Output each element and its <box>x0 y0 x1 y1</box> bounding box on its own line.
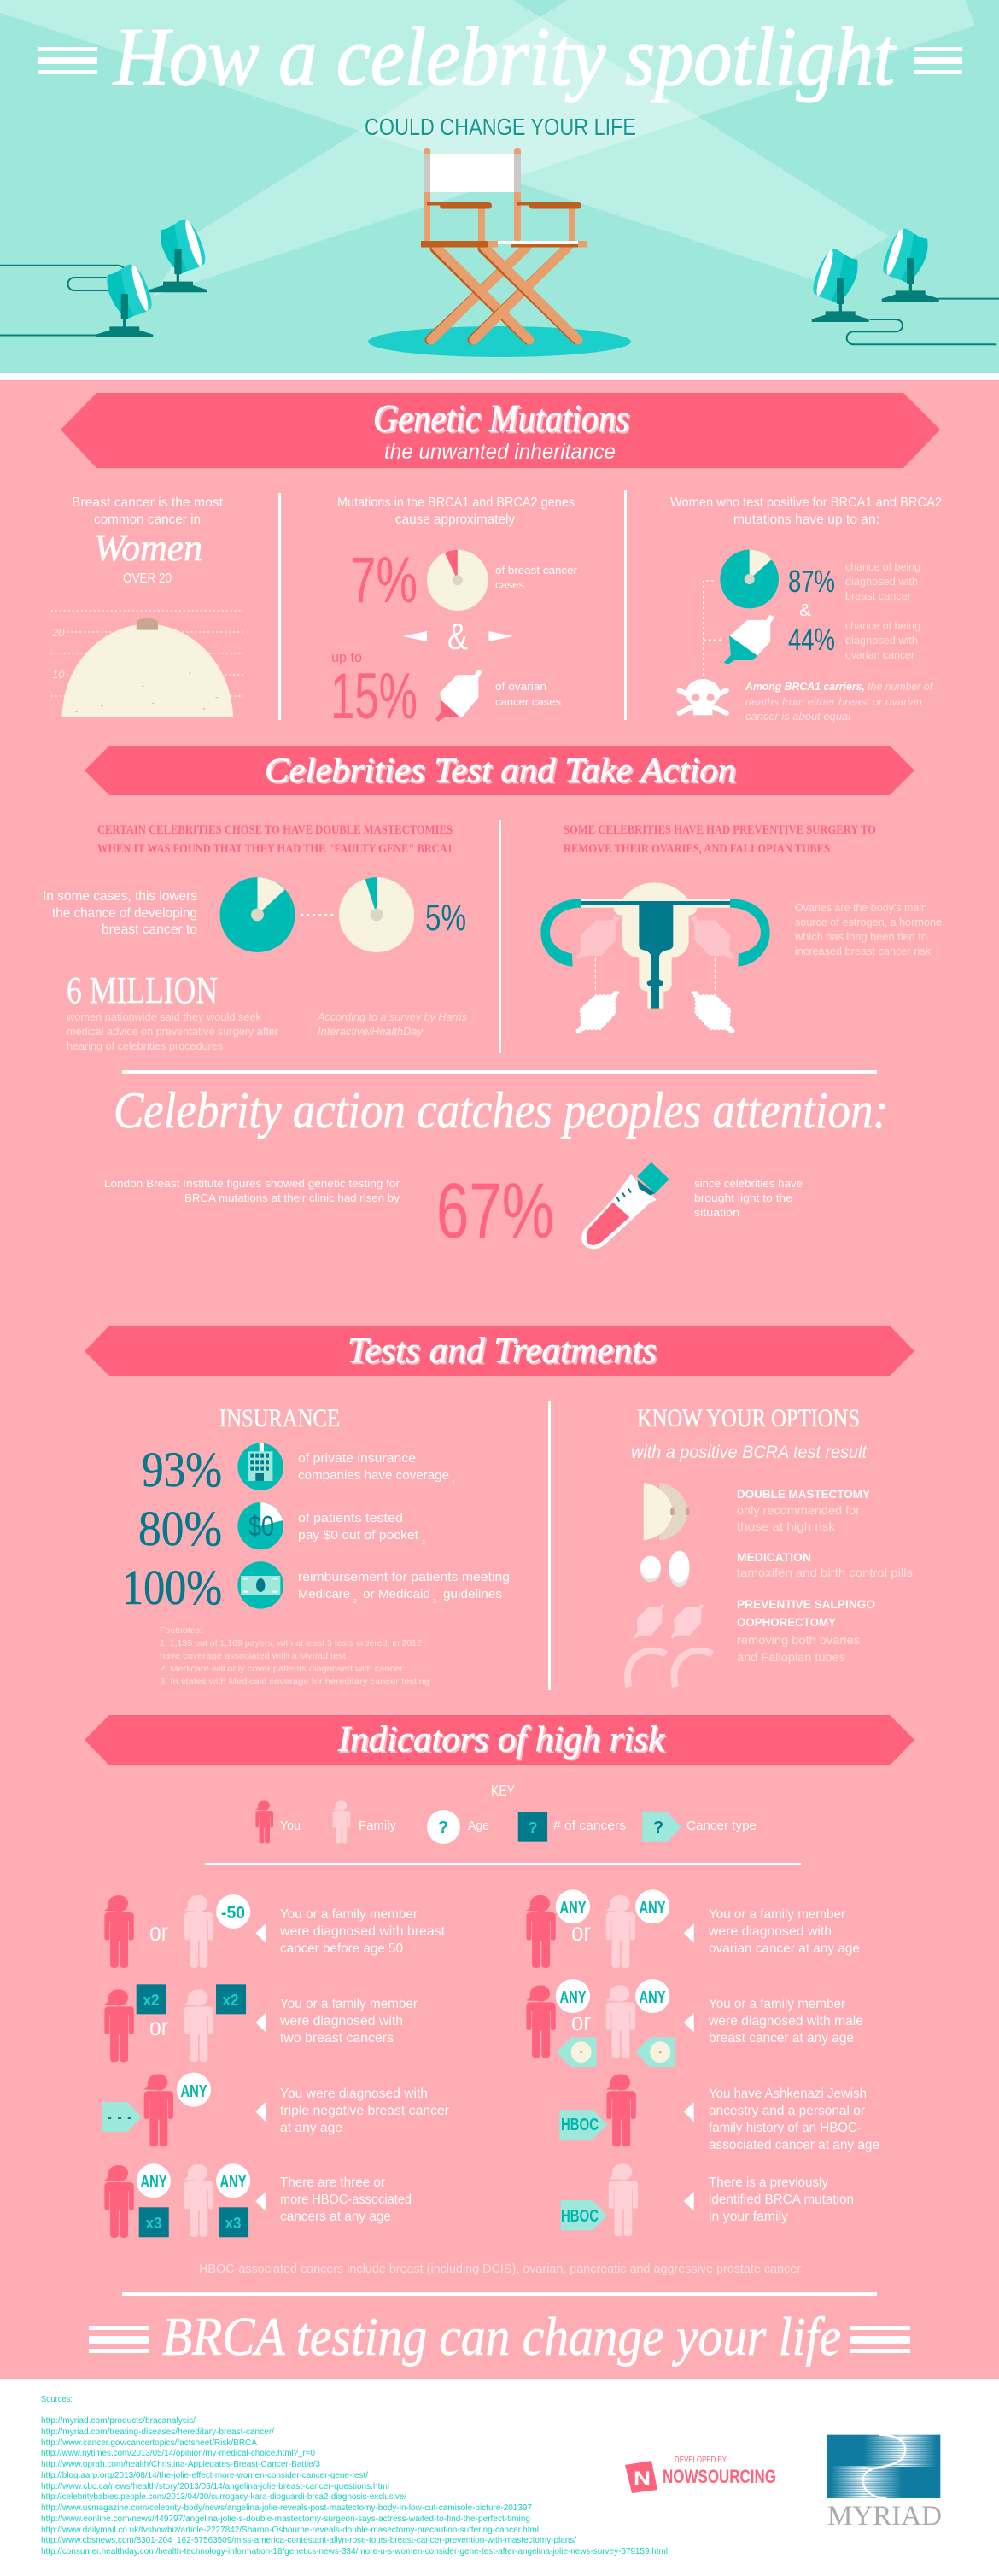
title stripes: right <box>914 47 962 74</box>
footnotes: 3. In states with Medicaid coverage for hereditary cancer testing <box>160 1677 429 1687</box>
chart: 87% pie <box>720 550 779 608</box>
sources: http://myriad.com/treating-diseases/hereditary-breast-cancer/ <box>41 2427 274 2437</box>
text: salpingo oophorectomy <box>737 1597 875 1664</box>
risk row 1 right: You or a family member <box>709 1907 845 1922</box>
sources: http://www.cancer.gov/cancertopics/factsheet/Risk/BRCA <box>41 2438 257 2448</box>
stat row: 80% <box>138 1501 425 1556</box>
closing banner: BRCA testing <box>89 2306 910 2367</box>
column: women: 10 <box>52 668 65 681</box>
panel: genetic mutations <box>51 393 942 733</box>
icon: zero dollars: $0 <box>248 1510 274 1542</box>
stat row: 100%: 3 <box>433 1599 436 1605</box>
risk row 4 left: more HBOC-associated <box>280 2193 412 2207</box>
text: salpingo oophorectomy: and Fallopian tubes <box>737 1650 845 1664</box>
text: ovaries: source of estrogen, a hormone <box>795 916 942 928</box>
stat row: 93%: 1 <box>452 1480 455 1486</box>
risk row 1 left: You or a family member <box>280 1907 418 1922</box>
chart: 7% pie <box>427 550 488 611</box>
risk row 2 right: were diagnosed with male <box>708 2014 863 2029</box>
divider <box>548 1401 551 1690</box>
risk row 1 right <box>526 1889 860 1968</box>
risk row 2 left: were diagnosed with <box>279 2014 403 2029</box>
stat row: 80%: of patients tested <box>298 1511 403 1525</box>
note: HBOC-associated cancers: HBOC-associated cancers include breast (including DCIS), ovarian, pancreatic and aggressive prostate cancer <box>199 2262 801 2276</box>
icon: banknote <box>237 1561 283 1609</box>
dividers <box>278 493 281 720</box>
text: double mastectomy: DOUBLE MASTECTOMY <box>737 1487 871 1501</box>
sources: http://myriad.com/products/bracanalysis/ <box>41 2416 196 2426</box>
risk row 4 left: x3 <box>225 2215 241 2232</box>
heading: Tests and Treatments <box>348 1332 657 1371</box>
column: lifetime risk: diagnosed with <box>845 634 918 647</box>
sources: http://www.cbsnews.com/8301-204_162-57563509/miss-america-contestant-allyn-rose-touts-breast-cancer-prevention-with-mastectomy-plans/ <box>41 2536 576 2545</box>
subheading: the unwanted inheritance <box>384 440 616 464</box>
column: lifetime risk: deaths from either breast or ovarian <box>745 695 922 708</box>
heading: insurance: INSURANCE <box>219 1404 340 1432</box>
subheading: positive test: with a positive BCRA test result <box>631 1443 868 1462</box>
risk row 3 left: at any age <box>280 2121 342 2135</box>
column: lifetime risk: 44% <box>788 622 835 657</box>
risk row 2 left: You or a family member <box>280 1997 418 2011</box>
column: lifetime risk: chance of being <box>845 619 920 632</box>
column: lifetime risk: diagnosed with <box>845 575 918 588</box>
risk row 3 left: ANY <box>181 2082 207 2101</box>
sources: http://www.dailymail.co.uk/tvshowbiz/article-2227842/Sharon-Osbourne-reveals-double-masectomy-precaution-suffering-cancer.html <box>41 2526 539 2535</box>
column: BRCA share of cancers: 7% <box>350 544 418 617</box>
key: ? <box>653 1818 663 1837</box>
icon: arrows <box>403 631 513 641</box>
stat: 6 million: 6 MILLION <box>67 969 218 1011</box>
column: lifetime risk: 87% <box>788 564 835 599</box>
logo: NowSourcing: DEVELOPED BY <box>675 2456 727 2465</box>
icon: pills <box>640 1551 689 1587</box>
key: You <box>280 1818 301 1833</box>
title stripes: left <box>38 47 97 74</box>
subheading: mastectomies: WHEN IT WAS FOUND THAT THEY HAD THE "FAULTY GENE" BRCA1 <box>97 842 453 856</box>
logo: NowSourcing: NOWSOURCING <box>663 2466 776 2487</box>
column: BRCA share of cancers: cases <box>495 578 524 591</box>
column: BRCA share of cancers: cancer cases <box>495 695 561 708</box>
column: women: Breast cancer is the most <box>72 495 224 510</box>
risk row 2 left: two breast cancers <box>280 2031 394 2046</box>
sources: http://consumer.healthday.com/health-technology-information-18/genetics-news-334/more-u-s-women-consider-gene-test-after-angelina-jolie-news-survey-679159.html <box>41 2547 668 2556</box>
icon: test tube <box>581 1162 669 1249</box>
stat row: 93%: companies have coverage <box>298 1468 449 1483</box>
subheading: preventive surgery: SOME CELEBRITIES HAVE HAD PREVENTIVE SURGERY TO <box>564 823 876 837</box>
text: salpingo oophorectomy: OOPHORECTOMY <box>737 1615 837 1629</box>
stat row: 80%: pay $0 out of pocket <box>298 1528 419 1543</box>
footnotes: 2. Medicare will only cover patients diagnosed with cancer <box>160 1665 404 1674</box>
risk row 3 left: You were diagnosed with <box>280 2087 428 2101</box>
column: lifetime risk: mutations have up to an: <box>733 512 879 527</box>
banner <box>85 1715 914 1765</box>
logo: NowSourcing <box>625 2456 776 2493</box>
stat row: 100%: or Medicaid <box>363 1587 430 1601</box>
icon: ovary 44% <box>724 615 774 664</box>
column: lifetime risk: chance of being <box>845 560 920 573</box>
subheading: mastectomies: CERTAIN CELEBRITIES CHOSE TO HAVE DOUBLE MASTECTOMIES <box>97 823 453 837</box>
heading: Celebrities Test and Take Action <box>265 751 736 789</box>
text: double mastectomy <box>737 1487 871 1533</box>
logo: NowSourcing: N <box>634 2468 651 2489</box>
key: Family <box>359 1818 396 1833</box>
stat row: 100%: 100% <box>122 1560 222 1615</box>
column: lifetime risk: Among BRCA1 carriers, the number of <box>745 680 933 693</box>
text: since celebrities: brought light to the <box>694 1191 792 1204</box>
text: ovaries: Ovaries are the body's main <box>795 901 927 914</box>
logo: Myriad: MYRIAD <box>827 2501 942 2532</box>
column: lifetime risk: & <box>799 601 812 620</box>
stat row: 80%: 2 <box>422 1540 425 1546</box>
subheading: mastectomies <box>97 823 453 856</box>
risk row 1 left <box>104 1894 446 1968</box>
column: BRCA share of cancers: of ovarian <box>495 680 546 693</box>
sources: http://www.nytimes.com/2013/05/14/opinion/my-medical-choice.html?_r=0 <box>41 2449 315 2458</box>
banner <box>85 746 914 795</box>
text: london breast institute <box>104 1177 400 1204</box>
subheading: preventive surgery: REMOVE THEIR OVARIES, AND FALLOPIAN TUBES <box>564 842 830 856</box>
risk row 1 right: were diagnosed with <box>708 1924 832 1939</box>
banner <box>61 393 940 468</box>
risk row 1 left: -50 <box>221 1904 245 1923</box>
key: ? <box>438 1818 448 1837</box>
key: Cancer type <box>686 1818 757 1833</box>
heading: Genetic Mutations <box>373 396 629 440</box>
risk row 2 left: or <box>149 2013 168 2041</box>
sources: Sources: <box>41 2395 73 2404</box>
column: lifetime risk: Women who test positive for BRCA1 and BRCA2 <box>670 495 942 510</box>
icon: double mastectomy <box>644 1483 689 1540</box>
text: chance lowered: breast cancer to <box>102 922 197 937</box>
sources: http://blog.aarp.org/2013/08/14/the-jolie-effect-more-women-consider-cancer-gene-test/ <box>41 2471 368 2480</box>
risk row 4 left: x3 <box>145 2215 162 2232</box>
column: BRCA share of cancers: Mutations in the BRCA1 and BRCA2 genes <box>337 495 575 510</box>
risk row 3 right: family history of an HBOC- <box>709 2121 862 2135</box>
risk row 4 left: ANY <box>220 2173 247 2192</box>
risk row 3 right: You have Ashkenazi Jewish <box>709 2087 867 2101</box>
risk row 3 right: HBOC <box>561 2116 599 2134</box>
text: london breast institute: BRCA mutations at their clinic had risen by <box>184 1191 400 1204</box>
risk row 1 right: ANY <box>639 1899 666 1917</box>
sources: http://www.usmagazine.com/celebrity-body/news/angelina-jolie-reveals-post-mastectomy-body-in-low-cut-camisole-picture-201397 <box>41 2503 532 2513</box>
sources: http://www.oprah.com/health/Christina-Applegates-Breast-Cancer-Battle/3 <box>41 2460 320 2469</box>
banner <box>85 1326 914 1376</box>
icon: skull <box>680 679 727 715</box>
risk row 3 left: - - - <box>108 2111 131 2125</box>
text: women nationwide: medical advice on preventative surgery after <box>67 1025 279 1038</box>
stat row: 100%: reimbursement for patients meeting <box>298 1570 510 1584</box>
icon: building <box>237 1443 283 1490</box>
text: since celebrities: situation <box>694 1206 739 1219</box>
column: BRCA share of cancers <box>330 495 578 733</box>
title: How a celebrity spotlight <box>112 11 897 103</box>
dotted connector <box>704 581 723 677</box>
footnotes: Footnotes: <box>160 1626 202 1636</box>
text: since celebrities: since celebrities have <box>694 1177 803 1190</box>
risk row 4 left <box>104 2163 412 2238</box>
risk row 4 left: ANY <box>140 2173 167 2192</box>
risk row 4 right <box>561 2163 854 2236</box>
stat row: 100%: guidelines <box>443 1587 502 1601</box>
risk row 1 right: or <box>571 1918 591 1947</box>
footnotes: 1. 1,135 out of 1,169 payers, with at least 5 tests ordered, in 2012 <box>160 1639 422 1648</box>
column: BRCA share of cancers: of breast cancer <box>495 564 578 577</box>
text: ovaries: increased breast cancer risk <box>795 945 931 957</box>
text: double mastectomy: only recommended for <box>737 1503 860 1517</box>
risk row 3 left: triple negative breast cancer <box>280 2104 449 2118</box>
panel: header stage <box>0 0 999 380</box>
text: survey source <box>317 1010 467 1038</box>
icon: spotlights right <box>812 228 999 344</box>
risk row 1 right: ovarian cancer at any age <box>709 1941 860 1956</box>
illustration: director's chair <box>368 148 631 357</box>
text: medication <box>737 1550 913 1579</box>
closing heading: BRCA testing can change your life <box>162 2306 841 2367</box>
stat: 5%: 5% <box>425 897 466 939</box>
panel: tests and treatments <box>85 1326 914 1690</box>
key <box>255 1783 757 1844</box>
risk row 2 right <box>526 1979 863 2067</box>
risk row 4 right: identified BRCA mutation <box>709 2193 854 2207</box>
stat row: 100%: 2 <box>353 1599 357 1605</box>
risk row 2 right: breast cancer at any age <box>709 2031 854 2046</box>
risk row 1 right: ANY <box>560 1899 587 1917</box>
text: salpingo oophorectomy: removing both ovaries <box>737 1633 860 1647</box>
stat row: 100%: Medicare <box>298 1587 350 1601</box>
icon: uterus diagram <box>540 882 770 1033</box>
risk row 2 right: You or a family member <box>709 1997 845 2011</box>
risk row 2 right: or <box>571 2008 591 2036</box>
column: BRCA share of cancers: up to <box>331 649 362 665</box>
sources: http://www.eonline.com/news/449797/angelina-jolie-s-double-mastectomy-surgeon-says-actress-waited-to-find-the-perfect-timing <box>41 2515 530 2524</box>
text: since celebrities <box>694 1177 803 1219</box>
subheading: preventive surgery <box>564 823 876 856</box>
text: women nationwide <box>66 1010 279 1052</box>
text: women nationwide: hearing of celebrities procedures <box>67 1039 223 1052</box>
column: lifetime risk: breast cancer <box>845 589 912 602</box>
chart: breast age gauge <box>51 611 243 717</box>
column: women: 20 <box>51 626 65 639</box>
text: medication: MEDICATION <box>737 1550 811 1564</box>
text: survey source: According to a survey by Harris <box>317 1010 467 1023</box>
panel: celebrities test and take action <box>43 746 942 1074</box>
stat row: 100% <box>122 1560 510 1615</box>
risk row 4 left: There are three or <box>280 2175 385 2190</box>
stat: 67%: 67% <box>436 1168 554 1255</box>
column: women: Women <box>94 527 202 569</box>
risk row 4 right: There is a previously <box>709 2175 828 2190</box>
text: london breast institute: London Breast Institute figures showed genetic testing for <box>104 1177 400 1190</box>
key: ? <box>528 1819 538 1836</box>
risk row 3 right: associated cancer at any age <box>709 2138 879 2152</box>
text: chance lowered: the chance of developing <box>52 906 197 921</box>
risk row 2 left: x2 <box>222 1992 239 2009</box>
key: Age <box>468 1818 489 1833</box>
pink main background <box>0 380 999 2379</box>
risk row 2 right: ANY <box>560 1988 587 2007</box>
text: double mastectomy: those at high risk <box>737 1519 836 1533</box>
icon: ovary 15% <box>435 670 482 722</box>
stat row: 93%: of private insurance <box>298 1451 416 1466</box>
key: KEY <box>491 1783 515 1800</box>
risk row 4 right: HBOC <box>561 2207 599 2226</box>
divider <box>499 820 501 1053</box>
risk row 1 left: were diagnosed with breast <box>279 1924 446 1939</box>
risk row 4 left: cancers at any age <box>280 2210 391 2224</box>
key: # of cancers <box>553 1818 626 1833</box>
column: lifetime risk <box>670 495 942 723</box>
text: women nationwide: women nationwide said they would seek <box>66 1010 261 1023</box>
text: chance lowered <box>43 889 197 937</box>
risk row 1 left: or <box>149 1918 168 1947</box>
column: BRCA share of cancers: cause approximately <box>395 512 515 527</box>
risk row 2 left: x2 <box>143 1992 159 2009</box>
risk row 4 right: in your family <box>709 2210 788 2224</box>
risk row 3 right <box>559 2074 879 2152</box>
column: women <box>51 495 243 717</box>
column: lifetime risk: ovarian cancer <box>845 648 915 661</box>
stat row: 93%: 93% <box>142 1442 222 1497</box>
stat row: 80%: 80% <box>138 1501 222 1556</box>
column: women: OVER 20 <box>123 571 172 586</box>
text: medication: tamoxifen and birth control pills <box>737 1566 913 1579</box>
icon: ovaries and tubes <box>628 1604 712 1687</box>
heading: Indicators of high risk <box>337 1720 665 1759</box>
risk row 2 left <box>104 1984 418 2062</box>
text: ovaries: which has long been tied to <box>794 930 927 943</box>
sources <box>41 2395 668 2556</box>
risk row 2 right: ANY <box>639 1988 666 2007</box>
stat row: 93% <box>142 1442 455 1497</box>
footnotes <box>160 1626 429 1687</box>
risk row 3 left <box>102 2073 449 2146</box>
text: chance lowered: In some cases, this lowers <box>43 889 197 904</box>
text: salpingo oophorectomy: PREVENTIVE SALPINGO <box>737 1597 875 1611</box>
heading: know your options: KNOW YOUR OPTIONS <box>637 1404 860 1432</box>
column: lifetime risk: cancer is about equal <box>745 710 851 723</box>
text: ovaries <box>794 901 942 957</box>
risk row 3 right: ancestry and a personal or <box>709 2104 865 2118</box>
column: women: common cancer in <box>94 512 201 527</box>
risk row 1 left: cancer before age 50 <box>280 1941 403 1956</box>
column: BRCA share of cancers: & <box>447 616 468 658</box>
icon: zero dollars <box>237 1502 283 1549</box>
chart: before and after pies <box>219 877 414 952</box>
subtitle: COULD CHANGE YOUR LIFE <box>365 114 636 140</box>
logo: Myriad <box>827 2435 942 2532</box>
heading: Celebrity action catches peoples attention: <box>114 1082 888 1139</box>
panel: celebrity action catches attention <box>104 1082 888 1255</box>
icon: spotlights left <box>0 219 207 337</box>
column: BRCA share of cancers: 15% <box>330 660 418 733</box>
panel: indicators of high risk <box>85 1715 914 2296</box>
sources: http://celebritybabies.people.com/2013/04/30/surrogacy-kara-dioguardi-brca2-diagnosis-exclusive/ <box>41 2492 406 2502</box>
footnotes: have coverage associated with a Myriad test <box>160 1652 346 1661</box>
text: survey source: Interactive/HealthDay <box>318 1025 424 1038</box>
sources: http://www.cbc.ca/news/health/story/2013/05/14/angelina-jolie-breast-cancer-questions.html <box>41 2482 389 2491</box>
